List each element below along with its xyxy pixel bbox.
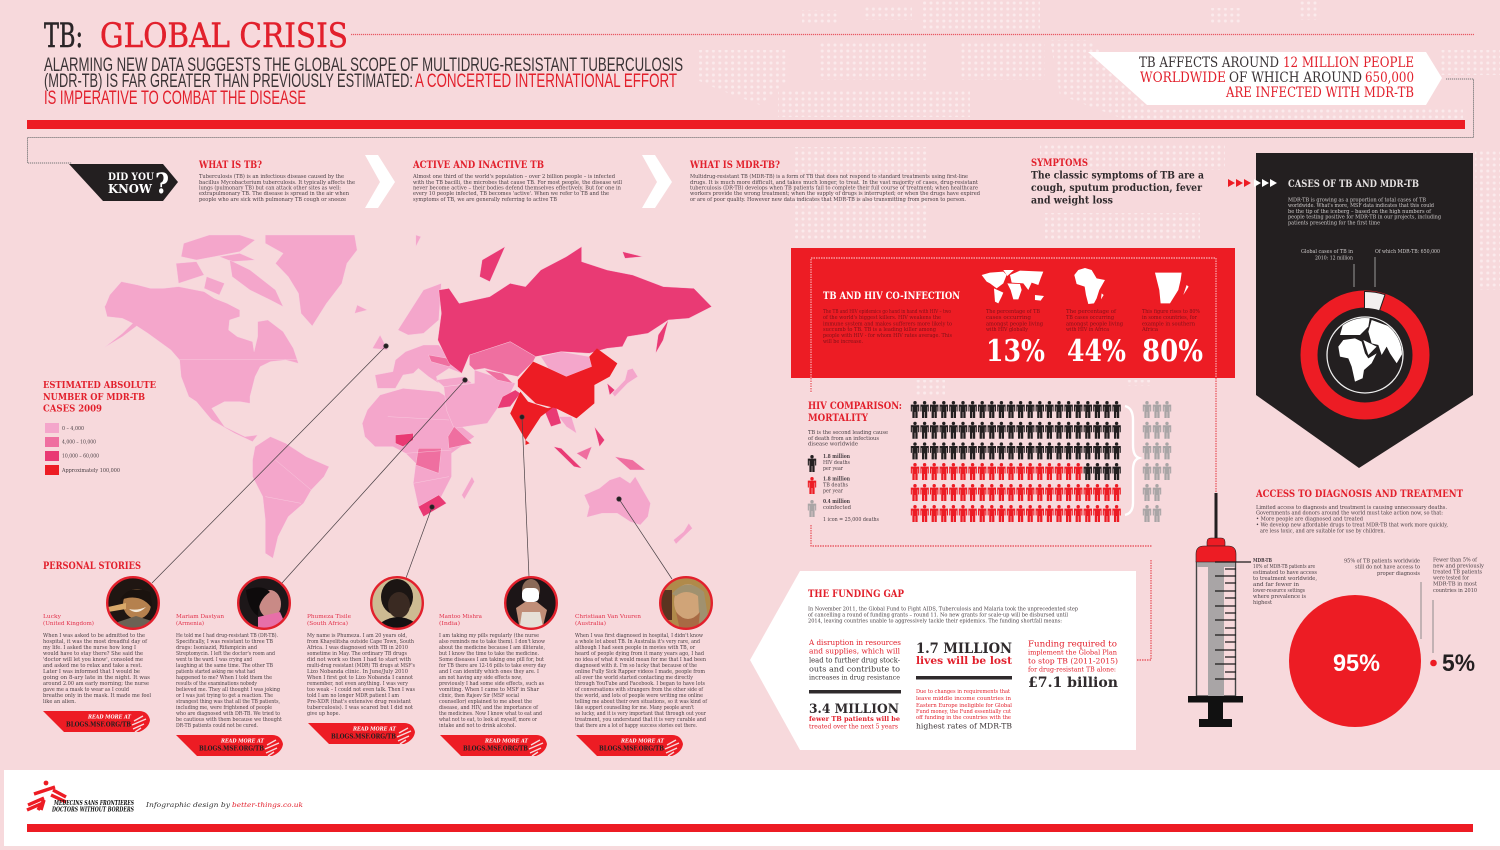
subtitle: IS IMPERATIVE TO COMBAT THE DISEASE — [44, 87, 306, 109]
arrow chevron 1 — [365, 155, 395, 208]
panel: TB and HIV co-infection: The percentage of TB — [986, 309, 1040, 315]
panel: HIV comparison mortality: MORTALITY — [808, 412, 868, 424]
story: Christiaan: Christiaan Van Vuuren — [575, 614, 641, 620]
funding column 3: for drug-resistant TB alone: — [1028, 666, 1116, 674]
panel: TB and HIV co-infection: amongst people living — [1066, 322, 1124, 328]
text block: what is TB: extrapulmonary TB. The disease is spread in the air when — [199, 191, 349, 197]
panel: HIV comparison mortality: 0.4 million — [823, 499, 850, 505]
story: Phumeza: did not work so then I had to start with — [307, 657, 412, 663]
story: Christiaan: a whole lot about TB. In Australia it's very rare, and — [575, 639, 700, 645]
text: MDR-TB access note: highest — [1253, 600, 1273, 606]
callout: TB affects 12 million: WORLDWIDE — [1140, 70, 1226, 86]
icon: world map — [982, 270, 1044, 303]
funding column 2: lives will be lost — [916, 656, 1012, 667]
photo: Mantoo — [504, 577, 558, 632]
read more ribbon 5: BLOGS.MSF.ORG/TB — [599, 744, 665, 752]
section: access to diagnosis: ACCESS TO DIAGNOSIS AND TREATMENT — [1255, 489, 1463, 500]
funding column 2: leave middle income countries in — [916, 696, 1011, 702]
story: Christiaan: so lucky, and it is very important that through out your — [575, 711, 706, 717]
panel: TB and HIV co-infection: amongst people living — [986, 322, 1044, 328]
panel: TB and HIV co-infection: 13% — [986, 334, 1045, 369]
panel: TB and HIV co-infection: This figure rises to 80% — [1142, 309, 1200, 315]
section: access to diagnosis: are less toxic, and are suitable for use by children. — [1260, 528, 1385, 534]
story: Mantoo — [438, 614, 547, 729]
text block: symptoms: SYMPTOMS — [1031, 158, 1088, 169]
subtitle: ALARMING NEW DATA SUGGESTS THE GLOBAL SCOPE OF MULTIDRUG-RESISTANT TUBERCULOSIS — [44, 54, 683, 76]
funding column 1: 3.4 MILLION — [809, 702, 899, 717]
story: Mantoo: (India) — [439, 620, 460, 627]
read more ribbon 4 — [440, 735, 547, 756]
text: MDR-TB access note: to treatment worldwide, — [1253, 576, 1317, 582]
chart: 95% vs 5%: were tested for — [1433, 576, 1469, 582]
subtitle: (MDR-TB) IS FAR GREATER THAN PREVIOUSLY ESTIMATED: — [44, 70, 413, 92]
story: Christiaan: online Fully Sick Rapper videos I made, people from — [575, 669, 705, 675]
read more ribbon 1: BLOGS.MSF.ORG/TB — [66, 720, 132, 728]
panel: TB and HIV co-infection: with HIV globally — [986, 327, 1029, 333]
story: Lucky: like an alien. — [43, 699, 76, 705]
story: Mariam: went to the ward. I was crying and — [176, 657, 252, 663]
story: Christiaan: that there are a lot of happy success stories out there. — [575, 723, 697, 729]
read more ribbon 5 — [576, 735, 683, 756]
title: TB: — [44, 16, 83, 56]
panel: TB and HIV co-infection: cases occurring — [986, 315, 1032, 321]
funding column 3: implement the Global Plan — [1028, 648, 1117, 656]
design credit: better-things.co.uk — [232, 801, 303, 809]
story: Phumeza: told I am no longer MDR patient I am — [307, 693, 399, 699]
text block: active and inactive TB — [412, 160, 622, 203]
panel: cases of TB and MDR-TB: patients presenting for the first time — [1288, 220, 1380, 226]
map legend: 4,000 – 10,000 — [62, 440, 96, 446]
read more ribbon 4: READ MORE AT — [484, 738, 529, 744]
text block: what is TB: Tuberculosis (TB) is an infectious disease caused by the — [199, 173, 344, 180]
funding column 1: outs and contribute to — [809, 664, 901, 674]
story: Phumeza: Phumeza Tisile — [307, 614, 352, 620]
text block: what is TB: lungs (pulmonary TB) but can attack other sites as well: — [199, 184, 341, 192]
pictogram chart — [911, 401, 1171, 522]
panel: TB and HIV co-infection: of the world's biggest killers. HIV weakens the — [823, 315, 941, 321]
callout: TB affects 12 million: OF WHICH AROUND — [1229, 70, 1362, 86]
did you know badge: KNOW — [108, 182, 153, 196]
icon: southern Africa — [1155, 273, 1189, 303]
text: MDR-TB access note — [1253, 558, 1317, 606]
text block: active and inactive TB: never become active – their bodies defend themselves effectively. But for one in — [413, 186, 621, 192]
text block: what is MDR-TB: or are of poor quality. However new data indicates that MDR-TB is also transmitting from person to person. — [690, 197, 966, 203]
story: Mariam: Specifically, I was resistant to three TB — [176, 639, 273, 645]
story: Mantoo: about the medicine because I am illiterate, — [439, 645, 545, 651]
panel: TB and HIV co-infection: The TB and HIV epidemics go hand in hand with HIV – two — [823, 309, 951, 315]
donut chart — [1309, 291, 1421, 411]
panel: TB and HIV co-infection: TB AND HIV CO-INFECTION — [823, 291, 960, 302]
dotted world map background — [697, 0, 1500, 396]
callout: TB affects 12 million: TB AFFECTS AROUND — [1139, 55, 1279, 71]
story: Mantoo: counsellor) explained to me about the — [439, 698, 532, 705]
photo: Mariam — [238, 577, 290, 630]
panel: HIV comparison mortality: TB is the second leading cause — [808, 430, 888, 436]
panel: the funding gap: of cancelling a round of funding grants – round 11. No new grants for scale-up will be disbursed until — [808, 612, 1068, 618]
map legend: CASES 2009 — [43, 404, 102, 414]
story: Christiaan: diagnosed with it. I'm so lucky that because of the — [575, 663, 697, 669]
story: Mantoo: vomiting. When I came to MSF in Shar — [438, 687, 539, 693]
funding column 1: A disruption in resources — [808, 638, 901, 647]
panel: TB and HIV co-infection: TB cases occurring — [1066, 315, 1114, 321]
story: Lucky: Later I was informed that I would be — [43, 669, 140, 675]
story: Lucky: Lucky — [43, 614, 62, 620]
arrow chevron 2 — [642, 155, 672, 208]
funding column 3 — [1028, 640, 1118, 691]
story: Lucky: my life. I asked the nurse how long I — [43, 645, 136, 651]
legend icons — [808, 455, 816, 517]
story: Phumeza: sometime in May. The ordinary TB drugs — [307, 651, 407, 657]
panel: HIV comparison mortality: coinfected — [823, 505, 852, 511]
story: Mantoo: clinic, then Rajeev Sir (MSF social — [439, 692, 519, 699]
callout: TB affects 12 million: 12 MILLION PEOPLE — [1283, 55, 1414, 71]
photo: Phumeza — [370, 577, 424, 632]
text block: what is TB — [198, 160, 355, 203]
text block: active and inactive TB: with the TB bacilli, the microbes that cause TB. For most people, the disease will — [413, 180, 622, 186]
chart: 95% vs 5% — [1289, 558, 1485, 727]
map legend: ESTIMATED ABSOLUTE — [43, 380, 156, 391]
panel: HIV comparison mortality — [808, 400, 1171, 523]
story: Mantoo: previously I had some side effects, such as — [439, 681, 544, 687]
panel: TB and HIV co-infection: succumb to TB. TB is a leading killer among — [823, 327, 937, 333]
panel: TB and HIV co-infection: in some countries, for — [1142, 315, 1197, 321]
chart: 95% vs 5%: 95% — [1333, 650, 1380, 677]
funding column 3: £7.1 billion — [1028, 675, 1118, 691]
panel: cases of TB and MDR-TB: Of which MDR-TB: 650,000 — [1375, 249, 1440, 255]
story: Mantoo: and I can identify which ones they are. I — [439, 669, 539, 675]
funding column 1: treated over the next 5 years — [809, 724, 898, 730]
section: access to diagnosis: Limited access to diagnosis and treatment is causing unnecessary deaths. — [1256, 505, 1447, 511]
panel: HIV comparison mortality: disease worldwide — [808, 442, 858, 448]
chart: 95% vs 5%: countries in 2010 — [1433, 588, 1478, 594]
syringe illustration — [1188, 493, 1251, 727]
photo: Lucky — [105, 575, 161, 632]
text block: what is TB: WHAT IS TB? — [198, 160, 262, 171]
map legend: 10,000 – 60,000 — [62, 454, 99, 460]
story: Mantoo: for TB there are 12-16 pills to take every day — [439, 663, 547, 669]
funding column 2: Eastern Europe ineligible for Global — [916, 703, 1012, 709]
read more ribbon 3 — [308, 723, 415, 744]
story: Phumeza: from Khayelitsha outside Cape Town, South — [307, 639, 414, 645]
story: Mantoo: intake and not to drink alcohol. — [439, 723, 516, 729]
chart: 95% vs 5%: treated TB patients — [1433, 570, 1482, 576]
story: Lucky: would have to stay there? She said the — [43, 651, 143, 657]
section: access to diagnosis: • More people are diagnosed and treated — [1256, 516, 1364, 522]
panel: TB and HIV co-infection: 44% — [1067, 334, 1126, 369]
logo wordmark — [51, 800, 134, 814]
story: Mariam: He told me I had drug-resistant TB (DR-TB). — [176, 632, 278, 639]
funding column 1: and supplies, which will — [809, 646, 901, 656]
text block: what is TB: people who are sick with pulmonary TB cough or sneeze — [199, 197, 346, 203]
story: Mantoo: I am taking my pills regularly (the nurse — [439, 632, 539, 639]
story: Lucky: and asked me to relax and take a rest. — [43, 663, 142, 669]
chart: 95% vs 5%: proper diagnosis — [1377, 571, 1420, 577]
story: Mantoo: also reminds me to take them). I don't know — [439, 638, 545, 645]
text block: symptoms: cough, sputum production, fever — [1031, 182, 1202, 194]
panel: the funding gap — [750, 571, 1136, 750]
logo wordmark: MEDECINS SANS FRONTIERES — [53, 800, 134, 807]
logo wordmark: DOCTORS WITHOUT BORDERS — [51, 806, 134, 814]
story: Phumeza: too weak – I could not even talk. Then I was — [307, 687, 415, 693]
text block: symptoms — [1031, 158, 1204, 206]
story: Christiaan: no idea of what it would mean for me that I had been — [575, 657, 706, 663]
text block: active and inactive TB: symptoms of TB, we are generally referring to active TB — [413, 197, 557, 203]
read more ribbon 2 — [176, 735, 283, 756]
story: Lucky: When I was asked to be admitted to the — [43, 633, 145, 639]
story: Lucky: (United Kingdom) — [43, 620, 94, 627]
chart: 95% vs 5%: MDR-TB in most — [1433, 582, 1478, 588]
story: Mantoo: the medicines. Now I know what to eat and — [439, 711, 542, 717]
design credit — [145, 801, 303, 809]
read more ribbon 3: READ MORE AT — [352, 726, 397, 732]
story: Mantoo: Mantoo Mishra — [439, 614, 483, 620]
story: Lucky: going on 8-ary late in the night. It was — [43, 675, 150, 681]
read more ribbon 1 — [43, 711, 150, 732]
text block: active and inactive TB: Almost one third of the world's population – over 2 billion people – is infected — [412, 174, 616, 180]
map legend: Approximately 100,000 — [61, 468, 121, 474]
story: Phumeza: tuberculosis). I was scared but I did not — [307, 704, 414, 711]
panel: HIV comparison mortality: per year — [823, 488, 843, 494]
read more ribbon 1: READ MORE AT — [87, 714, 132, 720]
story: Christiaan: through YouTube and Facebook. I began to have lots — [575, 681, 705, 687]
story: Mariam: or I was just trying to get a reaction. The — [176, 693, 273, 699]
story: Phumeza: give up hope. — [307, 711, 340, 717]
icon: MSF logo — [27, 781, 66, 810]
funding column 1: increases in drug resistance — [809, 674, 900, 682]
story: Phumeza — [306, 614, 415, 717]
panel: TB and HIV co-infection: example in southern — [1142, 322, 1195, 328]
story: Mantoo: Some diseases I am taking one pill for, but — [439, 657, 545, 663]
did you know badge — [69, 164, 178, 201]
panel: cases of TB and MDR-TB — [1256, 153, 1473, 468]
read more ribbon 2: READ MORE AT — [220, 738, 265, 744]
text: MDR-TB access note: estimated to have access — [1253, 570, 1317, 576]
footer — [4, 770, 1500, 846]
read more ribbon 4: BLOGS.MSF.ORG/TB — [463, 744, 529, 752]
story: Mantoo: what not to eat, to look at myself, more or — [439, 717, 537, 723]
story: Mariam: results of the examinations nobody — [176, 681, 258, 687]
arrows to cases panel — [1228, 179, 1277, 187]
panel: cases of TB and MDR-TB: people testing positive for MDR-TB in our projects, including — [1288, 214, 1441, 220]
text: MDR-TB access note: where prevalence is — [1253, 594, 1306, 600]
text block: symptoms: The classic symptoms of TB are a — [1031, 170, 1204, 182]
subtitle: A CONCERTED INTERNATIONAL EFFORT — [415, 70, 677, 92]
story: Christiaan: telling me about their own situations, so it was kind of — [575, 699, 708, 705]
story: Mantoo: disease, and HIV, and the importance of — [439, 705, 539, 711]
design credit: Infographic design by — [145, 801, 230, 809]
story: Lucky: 'doctor will let you know', consoled me — [43, 657, 143, 663]
panel: HIV comparison mortality: 1 icon = 25,000 deaths — [823, 517, 879, 523]
panel: cases of TB and MDR-TB: be the tip of the iceberg – based on the high numbers of — [1288, 209, 1432, 215]
story: Mariam: (Armenia) — [176, 620, 204, 627]
story: Mariam: including me, were frightened of people — [176, 705, 272, 711]
story: Christiaan — [575, 614, 708, 729]
heading: personal stories: PERSONAL STORIES — [43, 561, 141, 572]
story: Mariam: strangest thing was that all the TB patients, — [176, 699, 280, 705]
decorative country borders — [180, 359, 452, 503]
text block: active and inactive TB: ACTIVE AND INACTIVE TB — [412, 160, 544, 171]
chart: 95% vs 5%: Fewer than 5% of — [1433, 558, 1478, 564]
panel: the funding gap: In November 2011, the Global Fund to Fight AIDS, Tuberculosis and Malaria took the unprecedented step — [808, 606, 1079, 612]
story: Mariam: drugs: Isoniazid, Rifampicin and — [176, 645, 257, 651]
story: Christiaan: heard of people dying from it many years ago, I had — [575, 651, 704, 657]
story: Lucky: around 2.00 am early morning; the nurse — [43, 681, 149, 687]
icon: globe — [1327, 317, 1403, 393]
red header bar — [27, 120, 1465, 129]
photo: Christiaan — [658, 577, 714, 633]
funding column 2: highest rates of MDR-TB — [916, 722, 1012, 730]
funding column 2: 1.7 MILLION — [916, 641, 1012, 657]
story: Lucky: breathe only in the mask. It made me feel — [43, 693, 151, 699]
funding column 2: Fund money, the Fund essentially cut — [916, 709, 1012, 715]
story: Mariam: Mariam Dastyan — [176, 614, 224, 620]
text block: active and inactive TB: every 10 people infected, TB becomes 'active'. When we refer to TB and the — [413, 191, 609, 197]
panel: the funding gap: THE FUNDING GAP — [808, 589, 904, 600]
story: Christiaan: although I had seen people in movies with TB, or — [575, 645, 695, 651]
story: Mariam: patients started asking me what had — [176, 669, 255, 675]
funding column 1 — [808, 638, 901, 730]
section: access to diagnosis — [1255, 489, 1463, 534]
story: Mantoo: am not having any side effects now, — [439, 675, 522, 681]
text block: what is MDR-TB — [689, 160, 981, 203]
text: MDR-TB access note: 10% of MDR-TB patients are — [1253, 564, 1315, 570]
read more ribbon 3: BLOGS.MSF.ORG/TB — [331, 732, 397, 740]
funding column 1: lead to further drug stock- — [809, 656, 900, 664]
story: Christiaan: of conversations with strangers from the other side of — [575, 687, 704, 693]
story: Mariam: believed me. They all thought I was joking — [176, 687, 280, 693]
funding column 3: Funding required to — [1028, 640, 1117, 648]
chart: 95% vs 5%: 95% of TB patients worldwide — [1344, 558, 1420, 564]
story: Phumeza: remember, not even anything. I was very — [307, 681, 409, 687]
panel: TB and HIV co-infection: Africa — [1141, 327, 1159, 333]
story: Lucky: gave me a mask to wear as I could — [43, 687, 129, 693]
funding column 2: Due to changes in requirements that — [916, 689, 1011, 695]
text: MDR-TB access note: MDR-TB — [1253, 558, 1272, 564]
panel: HIV comparison mortality: HIV COMPARISON: — [808, 400, 902, 412]
story: Christiaan: all over the world started contacting me directly — [575, 675, 694, 681]
map legend — [43, 380, 156, 475]
panel: TB and HIV co-infection: The percentage of — [1066, 309, 1117, 315]
panel: cases of TB and MDR-TB: 2010: 12 million — [1315, 256, 1353, 262]
panel: TB and HIV co-infection: with HIV in Africa — [1066, 327, 1110, 333]
text block: what is MDR-TB: workers provide the wrong treatment; when the supply of drugs is interrupted; or when the drugs have expired — [690, 191, 981, 197]
section: access to diagnosis: • We develop new affordable drugs to treat MDR-TB that work more quickly, — [1256, 522, 1448, 528]
story: Christiaan: the world, and lots of people were writing me online — [575, 693, 703, 699]
chart: 95% vs 5%: new and previously — [1433, 564, 1485, 570]
panel: HIV comparison mortality: 1.8 million — [823, 454, 850, 460]
panel: TB and HIV co-infection: immune system and makes sufferers more likely to — [823, 322, 952, 328]
text: MDR-TB access note: and far fewer in — [1253, 582, 1300, 588]
leader lines to personal stories — [152, 344, 672, 583]
read more ribbon 5: READ MORE AT — [620, 738, 665, 744]
story: Phumeza: My name is Phumeza. I am 20 years old, — [307, 633, 407, 639]
panel: HIV comparison mortality: of death from an infectious — [808, 436, 879, 442]
panel: TB and HIV co-infection — [791, 248, 1235, 378]
chart: 95% vs 5%: still do not have access to — [1355, 564, 1420, 570]
funding column 3: to stop TB (2011-2015) — [1028, 656, 1118, 666]
story: Mariam: be cautious with them because we thought — [176, 717, 283, 723]
read more ribbon 2: BLOGS.MSF.ORG/TB — [199, 744, 265, 752]
icon: Africa — [1074, 268, 1105, 304]
story: Phumeza: multi-drug resistant (MDR) TB drugs at MSF's — [307, 662, 415, 669]
story: Mantoo: but I know the time to take the medicine. — [439, 651, 539, 657]
story: Christiaan: When I was first diagnosed in hospital, I didn't know — [575, 633, 703, 639]
panel: TB and HIV co-infection: 80% — [1142, 334, 1203, 369]
callout: TB affects 12 million: 650,000 — [1365, 70, 1414, 86]
did you know badge: ? — [155, 167, 169, 200]
story: Phumeza: Lizo Nobanda clinic. In June/July 2010 — [307, 669, 409, 675]
text block: symptoms: and weight loss — [1031, 194, 1113, 206]
panel: cases of TB and MDR-TB: Global cases of TB in — [1301, 249, 1353, 255]
choropleth world map — [105, 235, 712, 558]
story: Mariam: who are diagnosed with DR-TB. We tried to — [176, 711, 280, 717]
story: Christiaan: (Australia) — [575, 620, 606, 627]
text block: what is TB: bacillus Mycobacterium tuberculosis. It typically affects the — [199, 180, 355, 186]
story: Phumeza: Pre-XDR (that's extensive drug resistant — [307, 698, 412, 705]
funding column 1: fewer TB patients will be — [809, 715, 900, 723]
story: Lucky: hospital, it was the most dreadful day of — [43, 639, 148, 645]
funding column 2 — [916, 641, 1012, 730]
story: Mariam: DR-TB patients could not be cured. — [176, 723, 258, 729]
story: Phumeza: Africa. I was diagnosed with TB in 2010 — [306, 645, 409, 651]
did you know badge: DID YOU — [108, 172, 154, 183]
funding column 2: off funding in the countries with the — [916, 715, 1011, 721]
story: Mariam: happened to me? When I told them the — [176, 675, 272, 681]
panel: cases of TB and MDR-TB: MDR-TB is growing as a proportion of total cases of TB — [1288, 198, 1426, 204]
panel: HIV comparison mortality: per year — [823, 466, 843, 472]
panel: cases of TB and MDR-TB: CASES OF TB AND MDR-TB — [1288, 179, 1419, 190]
story: Mariam: Streptomycin. I left the doctor's room and — [176, 651, 275, 657]
panel: HIV comparison mortality: 1.8 million — [823, 476, 850, 482]
text block: what is MDR-TB: drugs. It is much more difficult, and takes much longer, to treat. In the vast majority of cases, drug-resistant — [690, 180, 979, 186]
chart: 95% vs 5%: 5% — [1442, 650, 1475, 677]
panel: HIV comparison mortality: HIV deaths — [823, 460, 850, 466]
story: Christiaan: treatment, you understand that it is very curable and — [575, 717, 706, 723]
panel: TB and HIV co-infection: people with HIV - for whom HIV rates average. This — [823, 333, 952, 339]
story: Mariam — [176, 614, 283, 729]
text block: what is MDR-TB: Multidrug-resistant TB (MDR-TB) is a form of TB that does not respond to standard treatments using first-line — [690, 173, 968, 180]
panel: HIV comparison mortality: TB deaths — [823, 482, 848, 488]
story: Phumeza: When I first got to Lizo Nobanda I cannot — [307, 675, 414, 681]
map legend: 0 – 4,000 — [62, 426, 85, 432]
map legend: NUMBER OF MDR-TB — [43, 392, 145, 403]
story: Mariam: laughing at the same time. The other TB — [176, 663, 273, 669]
callout: TB affects 12 million — [1088, 52, 1442, 105]
subtitle — [44, 54, 683, 109]
callout: TB affects 12 million: ARE INFECTED WITH MDR-TB — [1225, 85, 1414, 101]
story: Phumeza: (South Africa) — [307, 620, 348, 627]
story: Christiaan: like support counselling for me. Many people aren't — [575, 705, 695, 711]
story: Lucky — [43, 614, 151, 705]
panel: cases of TB and MDR-TB: worldwide. What's more, MSF data indicates that this could — [1288, 203, 1434, 209]
section: access to diagnosis: Governments and donors around the world must take action now, so that: — [1256, 510, 1443, 516]
panel: the funding gap: 2014, leaving countries unable to aggressively tackle their epidemics. The funding shortfall means: — [808, 618, 1062, 624]
text block: what is MDR-TB: WHAT IS MDR-TB? — [689, 160, 780, 171]
text: MDR-TB access note: lower-resource settings — [1253, 588, 1305, 594]
panel: TB and HIV co-infection: will be increase. — [823, 339, 863, 345]
title: GLOBAL CRISIS — [100, 16, 348, 56]
text block: what is MDR-TB: tuberculosis (DR-TB) develops when TB patients fail to complete their full course of treatment; when healthcare — [690, 184, 978, 192]
